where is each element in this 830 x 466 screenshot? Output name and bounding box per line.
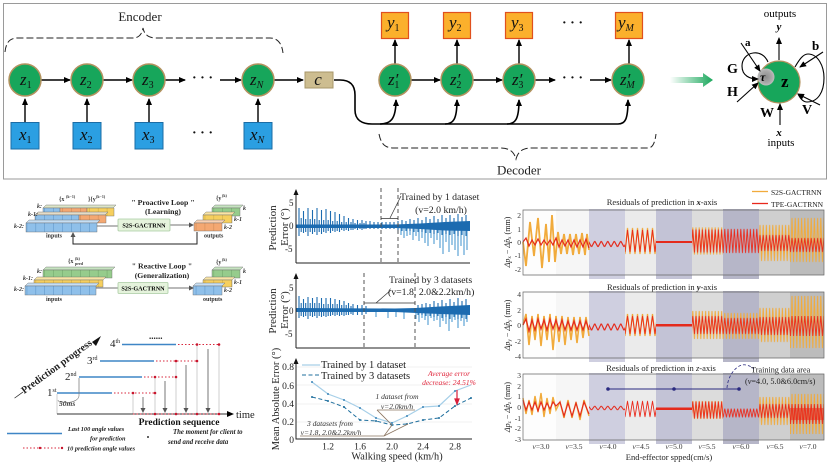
output labels: 1 — [395, 23, 400, 34]
x tick labels: v=5.5 — [699, 442, 716, 451]
axes frame — [523, 210, 824, 275]
stack labels: (k) — [75, 256, 81, 261]
context label: c — [314, 70, 322, 89]
flow arrows — [73, 225, 197, 244]
callout: three datasets — [301, 419, 362, 437]
y tick labels: -5 — [285, 329, 293, 339]
noise band — [296, 221, 470, 231]
output labels — [385, 13, 635, 34]
speed bands — [523, 209, 824, 279]
legend: three datasets: Trained by 3 datasets — [321, 371, 410, 382]
y axis label: Δp — [503, 259, 512, 268]
stack labels: {y — [216, 260, 221, 266]
callout: one dataset — [375, 392, 419, 411]
state labels: 3 — [149, 80, 154, 91]
y axis label units: Error (°) — [279, 291, 291, 329]
window span — [381, 196, 401, 218]
neuron detail diagram: a — [745, 37, 751, 49]
annotation: Trained by 1 dataset — [400, 192, 480, 203]
x axis label: Walking speed (km/h) — [351, 452, 443, 462]
stack labels: inputs — [46, 234, 63, 240]
decoder brace — [379, 134, 656, 159]
legend: residual series — [752, 188, 824, 209]
legend: 10 prediction angle values — [67, 446, 136, 452]
neuron detail diagram: W — [760, 106, 774, 121]
x tick labels: v=3.5 — [566, 442, 583, 451]
x tick labels: v=4.5 — [633, 442, 650, 451]
arrow: error decrease — [455, 390, 459, 404]
speed bands — [523, 373, 824, 444]
annotation speeds: (v=1.8, 2.0&2.2km/h) — [388, 287, 474, 298]
stack labels: k — [243, 206, 246, 212]
y tick labels — [515, 371, 521, 444]
sequence ordinals: st — [52, 388, 57, 394]
stack labels: outputs — [203, 297, 223, 303]
stack labels: (k) — [222, 193, 228, 198]
neuron detail diagram: V — [802, 103, 812, 118]
input labels: 1 — [27, 135, 32, 146]
state labels: z′ — [512, 70, 522, 89]
legend: Last 100 angle values — [67, 426, 125, 433]
panel: proactive loop — [14, 193, 246, 244]
callout: average error decrease: Average error — [427, 369, 470, 378]
ellipsis marks: · · · — [562, 71, 583, 86]
legend: send and receive data — [167, 439, 229, 446]
stack labels: k-2 — [224, 225, 232, 231]
stack labels: inputs — [46, 297, 63, 303]
y axis label: z — [508, 420, 513, 423]
callout leader lines — [300, 410, 415, 436]
stack labels: k-1: — [28, 212, 38, 218]
panel: prediction sequence timeline — [7, 331, 255, 452]
neuron detail diagram: outputs — [764, 8, 796, 20]
series: TPE — [523, 315, 824, 337]
training area leader — [727, 365, 754, 388]
y tick labels: 0 — [289, 306, 294, 316]
output stack — [193, 267, 243, 295]
light spikes — [376, 310, 467, 331]
chart: residuals y-axis — [503, 282, 824, 362]
y tick labels: -3 — [515, 435, 521, 444]
axes — [296, 275, 470, 348]
stack labels: {y — [216, 196, 221, 202]
x axis label: End-effector spped(cm/s) — [626, 452, 712, 462]
output labels: y — [511, 13, 519, 32]
training window markers — [381, 188, 398, 263]
sequence ordinals — [47, 338, 120, 399]
panel: encoder-decoder architecture — [4, 4, 826, 179]
y tick labels — [285, 283, 294, 339]
y axis label: (mm) — [503, 382, 512, 402]
y tick labels: 0.4 — [282, 400, 294, 410]
annotation speed: (v=2.0 km/h) — [415, 205, 467, 216]
input labels: 3 — [150, 135, 155, 146]
stack labels: k-2: — [14, 224, 24, 230]
stack labels: (k−1) — [96, 194, 106, 199]
legend — [7, 426, 243, 452]
y tick labels: 2 — [517, 306, 521, 315]
output labels: 2 — [457, 23, 462, 34]
chart: prediction error, three datasets — [267, 273, 474, 348]
stack labels: (k) — [222, 257, 228, 262]
stack labels: k-1 — [234, 280, 242, 286]
y tick labels: 5 — [289, 283, 294, 293]
y axis label: (mm) — [503, 299, 512, 319]
chart title: Residuals of prediction in y-axis — [607, 282, 717, 292]
speed bands — [523, 291, 824, 362]
prediction dots — [132, 343, 220, 415]
stack labels: k-1 — [234, 217, 242, 223]
state labels: 1 — [27, 80, 32, 91]
chart: prediction error, one dataset — [267, 188, 480, 263]
window span — [364, 290, 415, 303]
input stack — [25, 267, 115, 295]
y tick labels: 3 — [517, 371, 521, 380]
chart: residuals x-axis — [503, 197, 824, 279]
legend: one dataset: Trained by 1 dataset — [321, 360, 406, 371]
state labels: 2 — [87, 80, 92, 91]
interval bracket — [58, 378, 79, 403]
x tick labels: v=3.0 — [533, 442, 550, 451]
stack labels: (k−1) — [66, 194, 76, 199]
flow arrows — [96, 287, 193, 289]
y axis label: z — [508, 401, 513, 404]
sequence caption: Prediction sequence — [139, 418, 219, 428]
sequence ordinals: th — [116, 339, 120, 345]
neuron detail diagram: G — [727, 62, 738, 77]
x tick labels: v=4.0 — [600, 442, 617, 451]
series: one dataset — [311, 381, 471, 424]
y tick labels: 0 — [517, 403, 521, 412]
y tick labels: -2 — [515, 265, 521, 274]
chart: mean absolute error vs walking speed — [271, 347, 476, 462]
series: S2S — [523, 215, 824, 268]
state labels: z′ — [450, 70, 460, 89]
series: TPE — [523, 228, 824, 254]
x tick labels: 2.0 — [386, 442, 398, 452]
callout: three datasets: 3 datasets from — [306, 419, 354, 428]
series: S2S — [523, 293, 824, 351]
legend: residual series: TPE-GACTRNN — [771, 200, 824, 209]
prediction dotted lines — [114, 344, 219, 414]
x tick labels: v=6.5 — [767, 442, 784, 451]
y tick labels: 0.2 — [282, 418, 294, 428]
y axis label: − — [503, 248, 512, 256]
chart title: Residuals of prediction in z-axis — [606, 363, 716, 373]
neuron detail diagram: z — [781, 72, 789, 91]
x tick labels: v=7.0 — [800, 442, 817, 451]
time axis — [57, 413, 233, 415]
y tick labels: 0 — [517, 238, 521, 247]
annotation: Trained by 3 datasets — [389, 275, 472, 286]
neuron detail diagram — [727, 8, 824, 149]
neuron detail diagram: H — [727, 85, 738, 100]
generalization caption: (Generalization) — [135, 271, 190, 280]
continuation dots: ...... — [149, 331, 162, 341]
state circles — [9, 64, 644, 96]
stack labels: k: — [37, 269, 42, 275]
y axis label: Δp — [503, 423, 512, 433]
y axis head — [294, 189, 298, 195]
arrow: to neuron detail — [670, 73, 713, 87]
y axis label: Prediction — [267, 205, 279, 251]
sequence ordinals: 2 — [65, 371, 70, 383]
stack labels: k-2: — [14, 287, 24, 293]
time label: time — [236, 410, 255, 421]
last-values lines — [57, 344, 176, 393]
callout: average error decrease: decrease: 24.51% — [422, 378, 476, 387]
sequence ordinals: rd — [92, 356, 98, 362]
encoder label: Encoder — [118, 9, 162, 24]
callout: one dataset: 1 dataset from — [375, 392, 419, 401]
y axis label: Δp̂ — [503, 404, 512, 414]
x tick labels: v=5.0 — [666, 442, 683, 451]
y axis label: y — [508, 319, 513, 322]
light down spikes — [398, 226, 467, 256]
axes frame — [523, 374, 824, 440]
progress arrow head — [92, 336, 101, 346]
y axis label: − — [503, 413, 512, 421]
stack labels — [14, 256, 246, 303]
output labels: y — [387, 13, 395, 32]
y tick labels: 0.8 — [282, 363, 294, 373]
input labels: x — [80, 125, 88, 144]
y axis label: Prediction — [267, 288, 279, 334]
sequence ordinals: nd — [70, 372, 76, 378]
state labels: 3 — [518, 80, 523, 91]
training area speeds: (v=4.0, 5.0&6.0cm/s) — [745, 377, 816, 386]
y tick labels — [515, 290, 521, 361]
input labels: x — [250, 125, 258, 144]
y axis label: x — [508, 236, 513, 239]
state labels: z — [80, 70, 87, 89]
vertical guide lines — [57, 345, 219, 414]
encoder brace — [5, 28, 283, 53]
x tick labels: v=6.0 — [733, 442, 750, 451]
callout: three datasets: v=1.8, 2.0&2.2km/h — [301, 428, 362, 437]
y tick labels: -5 — [285, 244, 293, 254]
state labels: z′ — [388, 70, 398, 89]
x tick labels: 2.4 — [417, 442, 429, 452]
axes frame — [523, 292, 824, 358]
y axis label: Δp̂ — [503, 239, 512, 249]
y tick labels: 0.6 — [282, 382, 294, 392]
series: TPE — [523, 400, 824, 425]
y axis label: y — [508, 339, 513, 342]
model label: S2S-GACTRNN — [122, 222, 166, 230]
legend: residual series: S2S-GACTRNN — [771, 188, 822, 197]
training window markers — [364, 273, 415, 348]
input labels: N — [257, 135, 266, 146]
stack labels: k — [243, 269, 246, 275]
ellipsis marks — [192, 16, 583, 141]
output labels: M — [625, 23, 635, 34]
legend: for prediction — [90, 436, 126, 442]
input labels: 2 — [88, 135, 93, 146]
series: three datasets — [311, 396, 472, 426]
state labels: 1 — [394, 80, 399, 91]
input labels: x — [142, 125, 150, 144]
y axis label units: Error (°) — [279, 208, 291, 246]
state labels: z — [250, 70, 257, 89]
neuron detail diagram: y — [775, 21, 782, 33]
x tick labels: 1.6 — [354, 442, 366, 452]
y axis label: x — [508, 256, 513, 259]
stack labels: {x — [59, 197, 64, 203]
interval label: 50ms — [59, 399, 75, 408]
axes — [296, 192, 470, 263]
chart: residuals z-axis — [503, 363, 824, 462]
y tick labels — [282, 363, 294, 446]
y tick labels: 1 — [517, 392, 521, 401]
stack labels: k-2 — [224, 288, 232, 294]
progress arrow label: —Prediction progress — [10, 338, 94, 403]
decoder label: Decoder — [497, 162, 542, 178]
proactive heading: " Proactive Loop " — [131, 198, 195, 207]
neuron detail diagram: b — [812, 38, 819, 53]
y tick labels: -2 — [515, 337, 521, 346]
model box — [118, 282, 168, 294]
chain arrows — [25, 40, 629, 122]
y tick labels: 0 — [289, 221, 294, 231]
context connection lines — [334, 80, 628, 124]
y tick labels — [285, 198, 294, 254]
training data line — [606, 387, 741, 391]
stack labels: k: — [37, 204, 42, 210]
x tick labels: 1.2 — [322, 442, 334, 452]
y tick labels: -1 — [515, 414, 521, 423]
output labels: 3 — [519, 23, 524, 34]
y tick labels — [515, 211, 521, 274]
axes — [296, 360, 472, 439]
y axis label: Δp — [503, 342, 512, 351]
input stack — [26, 205, 116, 232]
stack labels: pred — [75, 261, 84, 266]
sequence ordinals: 3 — [87, 355, 92, 367]
neuron detail diagram: x — [775, 127, 782, 139]
reactive heading: " Reactive Loop " — [132, 262, 192, 270]
state labels: z — [142, 70, 149, 89]
callout: average error decrease — [422, 369, 476, 387]
series: S2S — [523, 392, 824, 436]
y tick labels: 1 — [517, 225, 521, 234]
y axis label: − — [503, 331, 512, 339]
stack labels — [14, 193, 246, 240]
ellipsis marks: · · · — [192, 126, 213, 141]
state labels: N — [256, 80, 265, 91]
state labels: M — [625, 80, 635, 91]
context box — [305, 72, 333, 88]
output stack — [194, 205, 243, 231]
y tick labels: 5 — [289, 198, 294, 208]
noise band — [296, 305, 470, 315]
dark spikes — [299, 296, 466, 319]
input labels — [18, 125, 266, 146]
y axis head — [294, 358, 298, 364]
model label: S2S-GACTRNN — [121, 286, 165, 292]
y tick labels: 2 — [517, 382, 521, 391]
grid lines — [296, 367, 472, 422]
learning caption: (Learning) — [145, 207, 181, 216]
ellipsis marks: · · · — [192, 71, 213, 86]
input labels: x — [19, 125, 27, 144]
sequence ordinals: 1 — [47, 387, 52, 399]
ellipsis marks: · · · — [562, 16, 583, 31]
neuron detail diagram: τ — [760, 70, 766, 84]
panel: reactive loop — [14, 256, 246, 303]
stack labels: }{y — [88, 197, 96, 203]
y axis head — [294, 273, 298, 279]
y tick labels: -2 — [515, 424, 521, 433]
x tick labels — [322, 442, 461, 452]
state labels: z′ — [620, 70, 630, 89]
x tick labels — [533, 442, 817, 451]
state labels — [19, 70, 635, 91]
y axis label: Mean Absolute Error (°) — [271, 347, 282, 450]
stack labels: outputs — [204, 234, 224, 240]
output boxes — [382, 12, 642, 38]
output labels: y — [618, 13, 626, 32]
y axis label: Δp̂ — [503, 322, 512, 332]
input boxes — [11, 122, 272, 149]
y tick labels: 2 — [517, 211, 521, 220]
output labels: y — [449, 13, 457, 32]
down arrows — [143, 349, 208, 412]
y tick labels: 0 — [289, 436, 294, 446]
state labels: z — [20, 70, 27, 89]
callout: one dataset: v=2.0km/h — [381, 402, 413, 411]
training area label: Training data area — [751, 366, 811, 374]
neuron detail diagram: inputs — [768, 137, 794, 149]
chart title: Residuals of prediction in x-axis — [607, 197, 717, 207]
state labels: 2 — [456, 80, 461, 91]
stack labels: k-1: — [23, 276, 33, 282]
x tick labels: 2.8 — [449, 442, 461, 452]
legend: The moment for client to — [173, 429, 243, 436]
y tick labels: 4 — [517, 290, 521, 299]
y tick labels: 0 — [517, 321, 521, 330]
sequence ordinals: 4 — [110, 338, 116, 350]
model box — [118, 219, 170, 231]
stack labels: {x — [68, 259, 73, 265]
y tick labels: -4 — [515, 352, 521, 361]
y axis label: (mm) — [503, 216, 512, 236]
y tick labels: -1 — [515, 251, 521, 260]
dark spikes — [299, 208, 466, 236]
